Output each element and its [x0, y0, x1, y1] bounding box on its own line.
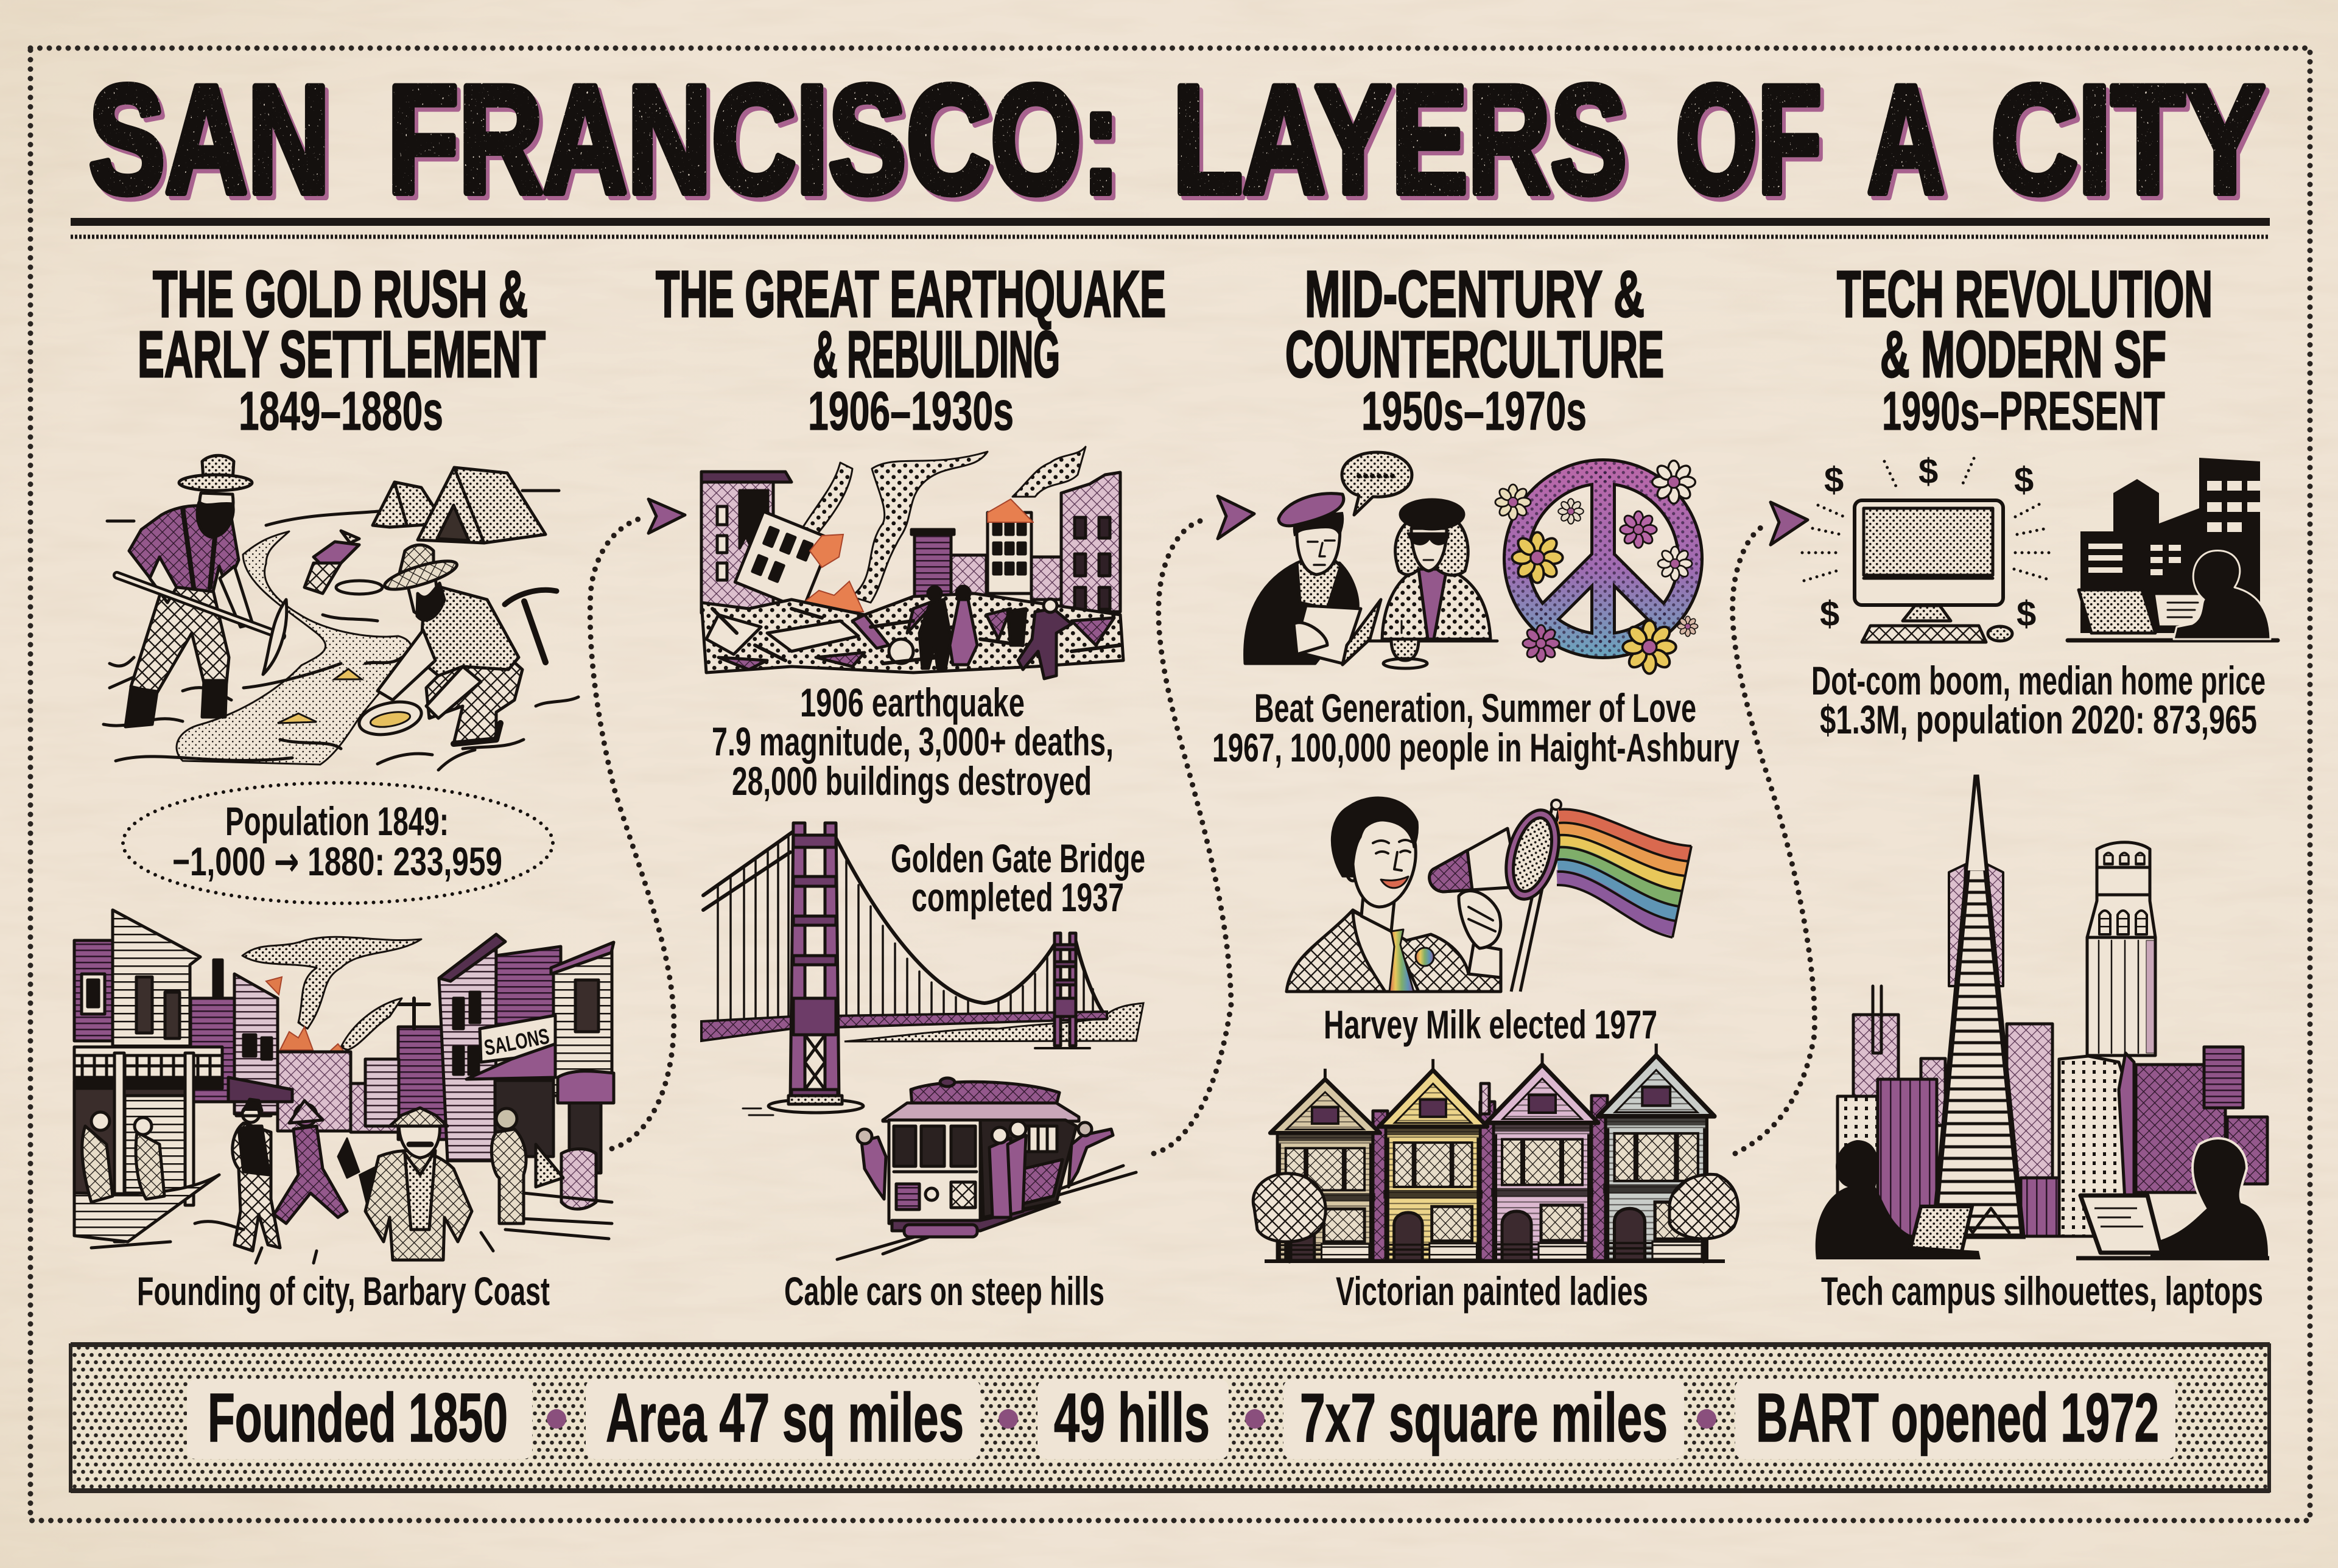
salons sign: SALONS: [482, 1023, 552, 1060]
purple mid buildings: [191, 960, 292, 1114]
panel: gold rush: [74, 257, 614, 1314]
far shore: [844, 1003, 1143, 1041]
city silhouette: [2080, 458, 2260, 633]
illustration: 1906 earthquake ruins: [701, 447, 1123, 679]
trees: [1253, 1174, 1738, 1261]
heading: counterculture: MID-CENTURY &: [1305, 257, 1645, 331]
callout: population ellipse: −1,000 → 1880: 233,959: [172, 838, 502, 885]
background buildings: [1838, 986, 2267, 1236]
seated figures on porch: [82, 1112, 164, 1202]
rails: [837, 1166, 1136, 1259]
dollar signs: $: [1824, 460, 1844, 500]
left pink ruined building: [701, 472, 792, 613]
collapsed building: [735, 511, 831, 609]
heading: earthquake: [656, 257, 1166, 442]
gold nuggets: [278, 669, 362, 723]
heading: earthquake: THE GREAT EARTHQUAKE: [656, 257, 1166, 331]
fact: founded: [187, 1379, 532, 1459]
title: [89, 54, 2265, 225]
heading: gold rush: THE GOLD RUSH &: [153, 257, 528, 331]
distant buildings: [278, 998, 450, 1139]
fact: hills: [1037, 1379, 1229, 1459]
caption: earthquake facts: 28,000 buildings destroyed: [732, 758, 1092, 803]
rubble: [701, 593, 1123, 673]
left saloon building: [74, 910, 222, 1242]
standing mid buildings: [911, 499, 1062, 600]
title: CITY: [1991, 54, 2265, 225]
peace sign with flowers: [1495, 461, 1698, 674]
water ripples: [104, 615, 578, 770]
caption: earthquake facts: 7.9 magnitude, 3,000+ deaths,: [712, 719, 1114, 764]
fist: [1459, 891, 1501, 978]
illustration: Beat poets in cafe: [1245, 452, 1698, 674]
woman with sunglasses: [1368, 500, 1497, 641]
caption: Golden Gate: completed 1937: [911, 875, 1124, 920]
caption: Harvey Milk: Harvey Milk elected 1977: [1324, 1002, 1657, 1047]
caption: Founding: Founding of city, Barbary Coast: [137, 1269, 550, 1314]
flames: [796, 534, 863, 612]
illustration: Golden Gate Bridge: [701, 823, 1145, 1115]
rainbow flag: [1511, 800, 1691, 992]
illustration: Harvey Milk with megaphone and flag: [1287, 797, 1691, 992]
caption: dot-com: [1811, 658, 2266, 742]
fleeing people: [919, 586, 1072, 679]
riders: [857, 1121, 1113, 1217]
heading: gold rush: EARLY SETTLEMENT: [138, 317, 546, 391]
heading: gold rush: [138, 257, 546, 442]
ground line: [1265, 1259, 1725, 1263]
illustration: dot-com computer: [1802, 452, 2278, 642]
dollar signs: $: [2014, 460, 2034, 500]
front dotted tower: [2059, 1053, 2134, 1236]
bridge deck: [701, 1012, 1107, 1041]
head: [1332, 797, 1417, 931]
caption: Beat Generation: 1967, 100,000 people in Haight-Ashbury: [1212, 725, 1739, 770]
standing miner with pickaxe: [117, 455, 341, 727]
panel: counterculture: [1212, 257, 1739, 1314]
house 4: [1598, 1043, 1715, 1260]
caption: Victorians: Victorian painted ladies: [1336, 1269, 1648, 1314]
caption: cable cars: Cable cars on steep hills: [784, 1269, 1104, 1314]
megaphone: [1430, 804, 1568, 905]
arrow 3: [1733, 502, 1814, 1153]
dollar signs: [1820, 452, 2036, 634]
caption: earthquake facts: [712, 680, 1114, 803]
title: OF: [1676, 54, 1822, 225]
Transamerica Pyramid: [1934, 775, 2023, 1236]
panel: earthquake: [656, 257, 1166, 1314]
heading: earthquake: 1906–1930s: [808, 381, 1014, 442]
suit: [1287, 910, 1501, 992]
right pink building: [1061, 472, 1120, 612]
heading: tech: 1990s–PRESENT: [1882, 381, 2165, 442]
fact: 7x7: [1283, 1379, 1684, 1459]
smoke plumes: [798, 447, 1086, 603]
stream: [177, 531, 412, 765]
heading: tech: [1837, 257, 2213, 442]
caption: Beat Generation: [1212, 685, 1739, 770]
fact: BART: [1735, 1379, 2175, 1459]
dollar signs: $: [2017, 594, 2036, 634]
figures on right boardwalk: [491, 1108, 563, 1223]
heading: gold rush: 1849–1880s: [239, 381, 443, 442]
suspension cables: [703, 828, 1107, 1023]
illustration: Barbary Coast street: [74, 910, 614, 1263]
separator dot: [1697, 1409, 1716, 1429]
right storefronts: [439, 934, 614, 1239]
house 3: [1486, 1053, 1598, 1261]
radiating rays: [1802, 458, 2055, 581]
computer: [1855, 500, 2012, 642]
flames: [266, 977, 348, 1056]
title: SAN: [89, 54, 330, 225]
separator dot: [1245, 1409, 1265, 1429]
arrow 2: [1154, 496, 1254, 1153]
dollar signs: $: [1820, 594, 1839, 634]
heading: counterculture: [1285, 257, 1664, 442]
Coit Tower: [2087, 842, 2155, 1055]
house 2: [1378, 1059, 1487, 1261]
bottom facts bar: [71, 1345, 2270, 1491]
separator dot: [999, 1409, 1018, 1429]
title rule: [71, 218, 2270, 237]
heading: counterculture: COUNTERCULTURE: [1285, 317, 1664, 391]
dollar signs: $: [1918, 452, 1938, 491]
fact: founded: Founded 1850: [208, 1379, 508, 1456]
fact: area: [586, 1379, 980, 1459]
house 1: [1270, 1069, 1380, 1261]
tents: [107, 467, 559, 543]
coffee cup: [1383, 621, 1427, 668]
caption: Beat Generation: Beat Generation, Summer of Love: [1254, 685, 1696, 730]
caption: Golden Gate: [891, 836, 1145, 920]
illustration: gold miners: [104, 455, 578, 770]
fact: hills: 49 hills: [1054, 1379, 1210, 1456]
kneeling miner panning: [356, 545, 556, 744]
callout: population ellipse: Population 1849:: [225, 799, 449, 844]
car body: [883, 1078, 1079, 1237]
main tower: [743, 823, 863, 1115]
caption: earthquake facts: 1906 earthquake: [800, 680, 1025, 725]
right worker silhouette: [2076, 1138, 2269, 1259]
small miner: [304, 531, 382, 594]
heading: counterculture: 1950s–1970s: [1361, 381, 1587, 442]
laptops and worker: [2068, 551, 2278, 640]
separator dot: [547, 1409, 566, 1429]
street figures: [91, 1099, 493, 1263]
panel: tech revolution: [1802, 257, 2278, 1314]
smoke: [242, 937, 421, 1050]
arrow 1: [590, 499, 685, 1149]
heading: earthquake: & REBUILDING: [813, 317, 1060, 391]
speech bubble: [1342, 452, 1412, 515]
illustration: skyline with tech workers: [1816, 775, 2269, 1259]
title: LAYERS: [1173, 54, 1627, 225]
fact: 7x7: 7x7 square miles: [1300, 1379, 1668, 1456]
title: A: [1867, 54, 1945, 225]
heading: tech: & MODERN SF: [1880, 317, 2166, 391]
illustration: Victorian painted ladies: [1253, 1043, 1738, 1261]
callout: population ellipse: [123, 783, 553, 903]
left worker silhouette: [1816, 1140, 1981, 1259]
title: FRANCISCO:: [387, 54, 1120, 225]
building windows: [2088, 481, 2261, 575]
fact: area: Area 47 sq miles: [606, 1379, 964, 1456]
caption: Golden Gate: Golden Gate Bridge: [891, 836, 1145, 881]
far tower: [1035, 933, 1090, 1048]
man in beret: [1245, 494, 1381, 665]
illustration: cable car: [837, 1078, 1136, 1259]
side walls: [1373, 1083, 1607, 1261]
